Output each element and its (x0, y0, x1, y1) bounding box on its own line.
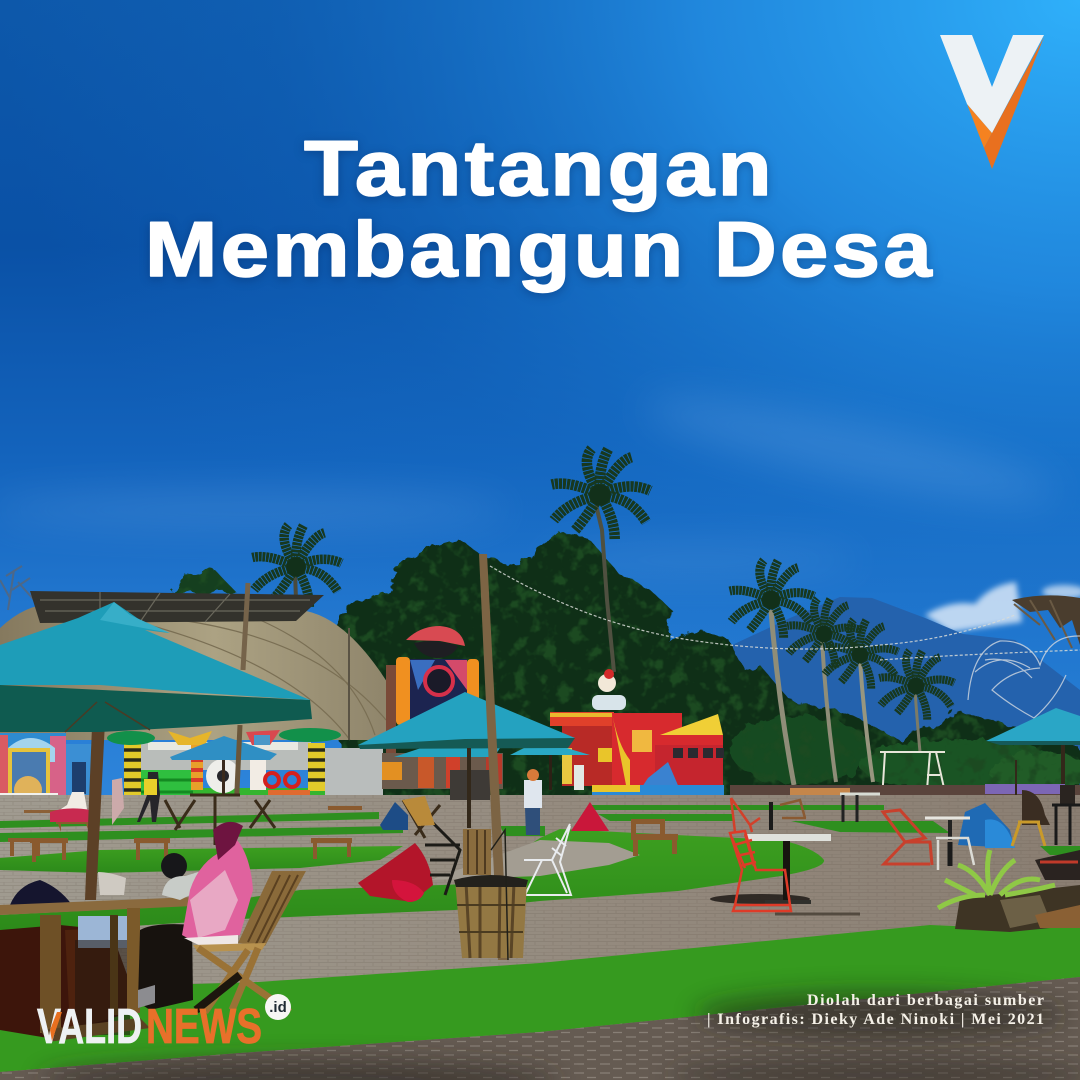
clouds near the mountain (925, 582, 1080, 632)
source credit: Diolah dari berbagai sumber (807, 992, 1044, 1009)
inflatable pirate ship (550, 669, 724, 797)
Validnews logo: NEWS (146, 1000, 262, 1054)
mountain (700, 597, 1080, 790)
inflatable tower (382, 626, 503, 789)
large umbrella pole (85, 702, 106, 900)
benches on the lawn (8, 806, 678, 862)
center pole, crate, barrel (454, 554, 528, 960)
wire ladder swing (880, 752, 950, 815)
tree line (172, 530, 1080, 800)
seated woman and child (138, 822, 253, 1010)
back wall (325, 748, 383, 796)
inflatable left castle (0, 733, 94, 811)
source credit (707, 992, 1044, 1028)
red triangular beanbag (571, 802, 609, 831)
title (145, 124, 935, 293)
inflatable green playground (107, 728, 341, 807)
bare tree on the left (0, 566, 34, 610)
plant and rocks (938, 850, 1080, 932)
gray path patch on lawn (430, 840, 640, 880)
center umbrella (358, 692, 575, 828)
lawn center (0, 829, 824, 931)
white wire chair (524, 824, 571, 895)
Validnews logo: .id (269, 999, 287, 1016)
corner V logo (940, 35, 1044, 169)
dome tent (0, 583, 389, 740)
foreground table group (0, 872, 193, 1042)
Validnews logo (37, 994, 291, 1054)
title: Membangun Desa (145, 205, 935, 293)
bottom paving (0, 977, 1080, 1080)
far right umbrella (986, 708, 1080, 800)
small wooden chairs and table (165, 795, 440, 845)
footer text shadow (695, 991, 1065, 1039)
distant people (50, 769, 542, 835)
red beanbag with chair (358, 796, 460, 902)
thatch decoration (1012, 595, 1080, 648)
wire heart sculpture (968, 636, 1080, 718)
small distant umbrella (170, 725, 277, 812)
far fence and stalls (730, 760, 1080, 810)
sky background (0, 0, 1080, 820)
far grass strips (0, 805, 1080, 855)
large teal umbrella (0, 602, 312, 732)
string lights (175, 566, 1080, 660)
red chairs and tables (731, 794, 974, 870)
palm trees (252, 449, 954, 785)
title: Tantangan (304, 124, 775, 212)
source credit: | Infografis: Dieky Ade Ninoki | Mei 2021 (707, 1011, 1044, 1028)
ground paving (0, 795, 1080, 1080)
main table and red chair (710, 831, 860, 914)
front grass (0, 925, 1080, 1072)
lawn upper (0, 846, 403, 873)
right beanbag and far-right furniture (958, 785, 1080, 848)
far umbrellas (394, 740, 590, 790)
Validnews logo: VALID (37, 1000, 142, 1054)
folding wooden chair (193, 871, 306, 1012)
